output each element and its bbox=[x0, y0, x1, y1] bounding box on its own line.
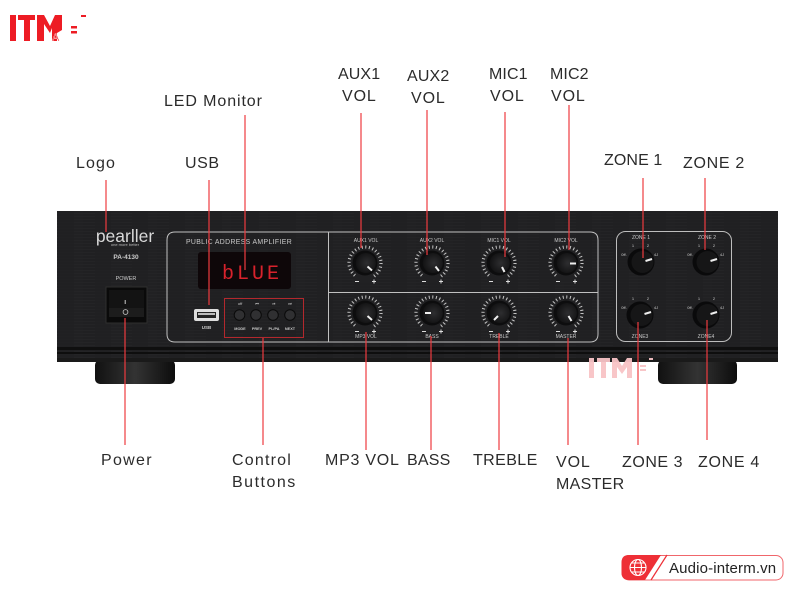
zone labels: 0ff. bbox=[621, 252, 627, 257]
label: AUX2 VOL: VOL bbox=[411, 90, 446, 107]
brand logo: pearller bbox=[96, 226, 154, 246]
label: ZONE 1: ZONE 1 bbox=[604, 152, 662, 169]
control buttons box bbox=[224, 298, 304, 338]
knob: MP3 VOL bbox=[349, 297, 381, 334]
knob: ZONE 2 bbox=[692, 248, 720, 276]
knob: AUX1 VOL bbox=[349, 247, 381, 284]
zone labels: 1 bbox=[632, 243, 635, 248]
zone labels: 0ff. bbox=[687, 252, 693, 257]
label: TREBLE: TREBLE bbox=[473, 452, 538, 469]
control buttons box: PREV bbox=[252, 327, 263, 331]
knob: MIC2 VOL bbox=[550, 247, 582, 284]
control buttons box: ⏯ bbox=[272, 301, 276, 306]
LED monitor: bLUE bbox=[222, 263, 282, 286]
zone panel outline bbox=[616, 232, 732, 342]
knob: ZONE 3 bbox=[626, 302, 654, 328]
zone labels: 4J bbox=[654, 252, 658, 257]
zone labels: 2 bbox=[647, 243, 650, 248]
right foot bbox=[658, 360, 737, 384]
faint watermark bbox=[589, 358, 653, 378]
power switch bbox=[106, 287, 147, 323]
label: MIC2 VOL: VOL bbox=[551, 88, 586, 105]
USB port: USB bbox=[202, 325, 212, 330]
label: BASS: BASS bbox=[407, 452, 450, 469]
label: USB: USB bbox=[185, 155, 220, 172]
knob: ZONE 1 bbox=[628, 248, 654, 276]
knob labels, top row: MIC2 VOL bbox=[554, 238, 578, 244]
label: AUX1 VOL: VOL bbox=[342, 88, 377, 105]
divider slash bbox=[651, 555, 667, 580]
knob labels, top row: AUX2 VOL bbox=[420, 238, 444, 244]
control buttons box: PL/PA bbox=[269, 327, 280, 331]
control buttons box: ⏭ bbox=[288, 301, 292, 306]
zone labels: 4J bbox=[720, 252, 724, 257]
control buttons box: ⏮ bbox=[255, 301, 259, 306]
knob labels, bottom row: MASTER bbox=[556, 334, 577, 340]
zone labels: 2 bbox=[647, 296, 650, 301]
zone labels: 4J bbox=[654, 305, 658, 310]
knob labels, bottom row: MP3 VOL bbox=[355, 334, 377, 340]
label: MP3 VOL: MP3 VOL bbox=[325, 452, 400, 469]
knob labels, bottom row: TREBLE bbox=[489, 334, 509, 340]
knob labels, top row: MIC1 VOL bbox=[487, 238, 511, 244]
knob labels, bottom row: BASS bbox=[425, 334, 439, 340]
control panel outline bbox=[167, 232, 598, 342]
label: Control Buttons: Control bbox=[232, 452, 292, 469]
amplifier body bbox=[57, 211, 778, 362]
label: AUX2 VOL: AUX2 bbox=[407, 68, 449, 85]
amplifier front panel bbox=[57, 211, 778, 384]
control buttons box: off bbox=[238, 301, 243, 306]
knob labels, top row bbox=[354, 238, 578, 244]
brand logo: one more better bbox=[111, 242, 140, 247]
label: MIC2 VOL: MIC2 bbox=[550, 66, 589, 83]
knob: MIC1 VOL bbox=[483, 247, 515, 284]
zone labels bbox=[621, 235, 724, 340]
zone labels: ZONE3 bbox=[632, 334, 649, 340]
label: Logo: Logo bbox=[76, 155, 116, 172]
label: Power: Power bbox=[101, 452, 153, 469]
LED monitor bbox=[198, 252, 291, 289]
icon: globe bbox=[630, 560, 646, 576]
panel heading: PUBLIC ADDRESS AMPLIFIER bbox=[186, 239, 292, 246]
website badge bbox=[622, 555, 783, 580]
label: ZONE 4: ZONE 4 bbox=[698, 454, 760, 471]
zone labels: ZONE 1 bbox=[632, 235, 650, 241]
pointer lines bbox=[106, 105, 707, 450]
USB port bbox=[194, 309, 219, 330]
zone labels: ZONE4 bbox=[698, 334, 715, 340]
ITMA logo bbox=[10, 15, 86, 44]
website text: Audio-interm.vn bbox=[669, 560, 776, 577]
zone labels: 2 bbox=[713, 243, 716, 248]
knob: TREBLE bbox=[483, 297, 515, 334]
control buttons box: MODE bbox=[234, 327, 246, 331]
knob: ZONE 4 bbox=[692, 302, 720, 328]
zone labels: 0ff. bbox=[621, 305, 627, 310]
label: MIC1 VOL: MIC1 bbox=[489, 66, 528, 83]
label: MIC1 VOL: VOL bbox=[490, 88, 525, 105]
control buttons box: NEXT bbox=[285, 327, 296, 331]
model number: PA-4130 bbox=[113, 254, 139, 261]
knob labels, bottom row bbox=[355, 334, 577, 340]
label: AUX1 VOL: AUX1 bbox=[338, 66, 380, 83]
red tab bbox=[622, 555, 661, 580]
label: ZONE 3: ZONE 3 bbox=[622, 454, 683, 471]
power label: POWER bbox=[116, 276, 136, 282]
zone labels: 4J bbox=[720, 305, 724, 310]
zone labels: 1 bbox=[632, 296, 635, 301]
knob: BASS bbox=[416, 297, 448, 334]
lower edge groove bbox=[57, 347, 778, 362]
zone labels: 1 bbox=[698, 243, 701, 248]
left foot bbox=[95, 360, 175, 384]
zone labels: 1 bbox=[698, 296, 701, 301]
zone labels: ZONE 2 bbox=[698, 235, 716, 241]
label: VOL MASTER: VOL bbox=[556, 454, 591, 471]
knob: AUX2 VOL bbox=[416, 247, 448, 284]
label: LED Monitor: LED Monitor bbox=[164, 93, 263, 110]
knob: MASTER bbox=[550, 297, 582, 334]
label: Control Buttons: Buttons bbox=[232, 474, 297, 491]
zone labels: 0ff. bbox=[687, 305, 693, 310]
label: ZONE 2: ZONE 2 bbox=[683, 155, 745, 172]
knob labels, top row: AUX1 VOL bbox=[354, 238, 378, 244]
letter A in logo: A bbox=[52, 32, 60, 44]
label: VOL MASTER: MASTER bbox=[556, 476, 624, 493]
zone labels: 2 bbox=[713, 296, 716, 301]
